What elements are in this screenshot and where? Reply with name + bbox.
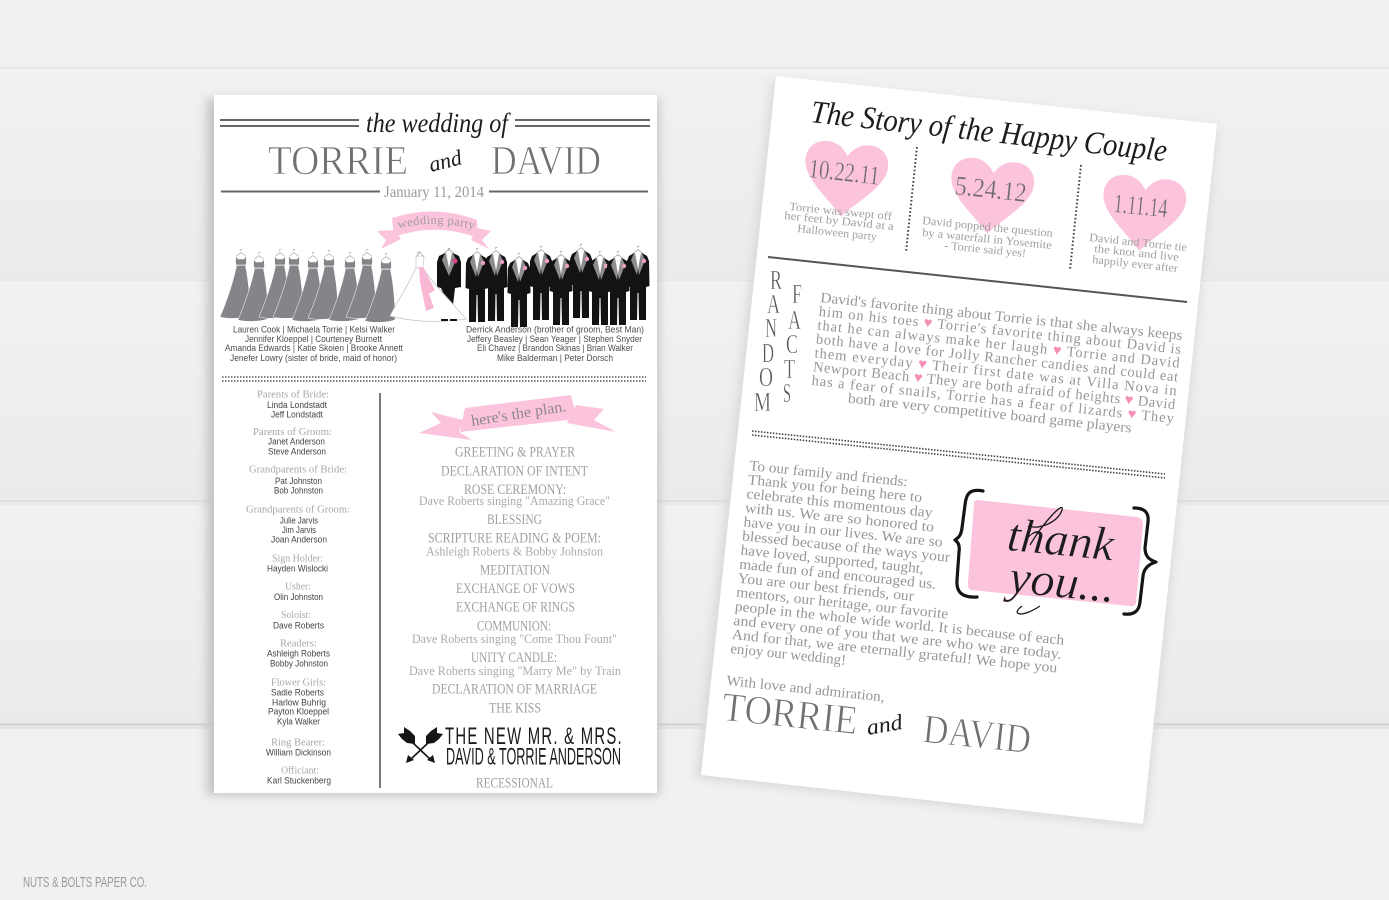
timeline: 5.24.12: - Torrie said yes! <box>944 240 1026 260</box>
thank-you letter paragraph: made fun of and encouraged us. <box>738 557 937 593</box>
heading: random (vertical letters): D <box>762 338 774 368</box>
heading: random (vertical letters): R <box>770 265 782 295</box>
sign-off: With love and admiration, <box>726 673 885 706</box>
family and attendants list: Harlow Buhrig <box>272 697 326 707</box>
timeline: 5.24.12: David popped the question <box>922 215 1054 240</box>
ceremony order list: THE KISS <box>489 700 541 716</box>
family and attendants list: Pat Johnston <box>275 476 322 486</box>
signature: couple names: and <box>865 709 905 740</box>
ribbon: here's the plan <box>419 395 616 440</box>
heading: couple names <box>268 137 601 183</box>
random facts paragraph: both are very competitive board game players <box>847 391 1133 437</box>
bridesmaid names: Jenefer Lowry (sister of bride, maid of honor) <box>230 353 397 363</box>
ceremony order list: COMMUNION: <box>477 618 551 634</box>
callout: thank you <box>955 490 1156 614</box>
thank-you letter paragraph: And for that, we are eternally grateful! We hope you <box>731 627 1058 676</box>
family and attendants list: Karl Stuckenberg <box>267 776 331 786</box>
family and attendants list <box>246 390 350 786</box>
thank-you letter paragraph: people in the whole wide world. It is because of each <box>734 599 1066 649</box>
family and attendants list: Joan Anderson <box>271 535 327 545</box>
random facts paragraph: Newport Beach ♥ They are both afraid of heights ♥ David <box>812 359 1177 413</box>
thank-you letter paragraph: with us. We are so honored to <box>744 500 935 536</box>
ceremony order list: BLESSING <box>487 512 542 528</box>
random facts paragraph: them everyday ♥ Their first date was at Villa Nova in <box>814 345 1178 399</box>
signature: couple names: DAVID <box>921 705 1033 762</box>
timeline: 10.22.11: Halloween party <box>797 223 878 243</box>
heading: facts (vertical letters): A <box>788 305 801 335</box>
bridesmaid names <box>225 324 403 363</box>
ceremony order list: Dave Roberts singing "Marry Me" by Train <box>409 663 621 678</box>
callout: thank you: thank <box>1005 509 1118 572</box>
illustration: bride gown <box>390 252 466 321</box>
groomsmen names: Mike Balderman | Peter Dorsch <box>497 353 613 363</box>
family and attendants list: Linda Londstadt <box>267 400 327 410</box>
family and attendants list: Olin Johnston <box>274 592 323 602</box>
ribbon: here's the plan: here's the plan. <box>470 398 567 430</box>
random facts paragraph: David's favorite thing about Torrie is that she always keeps <box>820 290 1184 344</box>
ceremony order list: EXCHANGE OF RINGS <box>456 600 575 616</box>
family and attendants list: Jeff Londstadt <box>271 409 323 419</box>
bridesmaid names: Amanda Edwards | Katie Skoien | Brooke Annett <box>225 343 403 353</box>
ceremony order list: Dave Roberts singing "Amazing Grace" <box>419 493 610 508</box>
thank-you letter paragraph: have loved, supported, taught, <box>740 543 925 577</box>
ceremony order list: GREETING & PRAYER <box>455 445 575 461</box>
groomsmen names <box>466 324 644 363</box>
family and attendants list: Grandparents of Groom: <box>246 504 350 515</box>
family and attendants list: Julie Jarvis <box>280 515 318 525</box>
bridesmaid names: Lauren Cook | Michaela Torrie | Kelsi Walker <box>233 324 395 334</box>
random facts paragraph: has a fear of snails, Torrie has a fear of lizards ♥ They <box>811 373 1175 427</box>
family and attendants list: Soloist: <box>281 610 311 621</box>
family and attendants list: Janet Anderson <box>268 437 325 447</box>
panel: wedding programme card <box>214 95 657 793</box>
family and attendants list: Parents of Bride: <box>257 390 329 401</box>
ceremony order list: MEDITATION <box>480 562 550 578</box>
ceremony order list: Ashleigh Roberts & Bobby Johnston <box>426 543 603 558</box>
heading: the new Mr. and Mrs.: THE NEW MR. & MRS. <box>445 724 622 750</box>
timeline: 10.22.11: 10.22.11 <box>807 153 881 191</box>
thank-you letter paragraph: Thank you for being here to <box>747 472 923 506</box>
family and attendants list: Officiant: <box>281 766 319 777</box>
heading: couple names: TORRIE <box>268 137 408 183</box>
random facts paragraph <box>809 290 1184 441</box>
heading: the new Mr. and Mrs.: DAVID & TORRIE ANDERSON <box>446 743 621 770</box>
timeline: 1.11.14: 1.11.14 <box>1112 188 1169 223</box>
timeline: 10.22.11 <box>784 139 894 243</box>
timeline: 1.11.14: the knot and live <box>1094 243 1179 264</box>
illustration: bridesmaid dresses <box>220 249 395 322</box>
family and attendants list: Flower Girls: <box>271 678 326 689</box>
heading: random (vertical letters) <box>754 265 782 417</box>
ceremony order list: DECLARATION OF MARRIAGE <box>432 682 597 698</box>
family and attendants list: Bob Johnston <box>274 486 323 496</box>
ceremony order list: ROSE CEREMONY: <box>464 482 566 498</box>
callout: thank you: you... <box>1003 551 1117 613</box>
thank-you letter paragraph: celebrate this momentous day <box>746 486 934 521</box>
heading: couple names: DAVID <box>491 137 601 183</box>
thank-you letter paragraph: To our family and friends: <box>749 458 908 490</box>
ceremony order list: UNITY CANDLE: <box>471 650 557 666</box>
heading: facts (vertical letters) <box>783 279 802 408</box>
heading: random (vertical letters): O <box>759 362 773 392</box>
family and attendants list: Sadie Roberts <box>271 688 324 698</box>
heading: facts (vertical letters): S <box>783 378 791 408</box>
ceremony order list: SCRIPTURE READING & POEM: <box>428 531 601 547</box>
thank-you letter paragraph: mentors, our heritage, our favorite <box>735 585 949 623</box>
heading: the wedding of <box>220 108 650 138</box>
family and attendants list: Ring Bearer: <box>271 737 325 748</box>
thank-you letter paragraph <box>730 458 1080 691</box>
timeline: 1.11.14: David and Torrie tie <box>1089 232 1187 254</box>
heading: random (vertical letters): N <box>765 313 777 343</box>
groomsmen names: Eli Chavez | Brandon Skinas | Brian Walker <box>477 343 633 353</box>
random facts paragraph: him on his toes ♥ Torrie's favorite thing about David is <box>818 304 1182 358</box>
thank-you letter paragraph: have you in our lives. We are so <box>743 514 943 551</box>
groomsmen names: Derrick Anderson (brother of groom, Best Man) <box>466 324 644 334</box>
ceremony order list: Dave Roberts singing "Come Thou Fount" <box>412 631 617 646</box>
date: January 11, 2014 <box>384 184 484 201</box>
thank-you letter paragraph: and every one of you that we are who we are today. <box>733 613 1062 663</box>
family and attendants list: William Dickinson <box>266 747 331 757</box>
card shadows <box>207 80 1217 827</box>
timeline: 5.24.12: 5.24.12 <box>953 170 1028 208</box>
bridesmaid names: Jennifer Kloeppel | Courteney Burnett <box>245 334 382 344</box>
timeline: 5.24.12 <box>922 156 1054 260</box>
timeline: 1.11.14: happily ever after <box>1092 254 1179 275</box>
family and attendants list: Usher: <box>285 581 311 592</box>
ceremony order list <box>409 445 621 716</box>
signature: couple names <box>720 683 1033 762</box>
icon: crossed arrows <box>398 727 443 763</box>
heading: facts (vertical letters): T <box>784 354 795 384</box>
illustration: groomsmen suits <box>466 244 650 327</box>
family and attendants list: Steve Anderson <box>268 446 326 456</box>
thank-you letter paragraph: blessed because of the ways your <box>741 528 951 566</box>
illustration: groom <box>437 248 461 314</box>
thank-you letter paragraph: enjoy our wedding! <box>730 641 847 669</box>
recessional: RECESSIONAL <box>476 775 553 791</box>
family and attendants list: Bobby Johnston <box>270 658 328 668</box>
timeline: 5.24.12: by a waterfall in Yosemite <box>922 227 1052 252</box>
ribbon: wedding party: wedding party <box>397 215 475 231</box>
heading: facts (vertical letters): F <box>792 279 802 309</box>
family and attendants list: Ashleigh Roberts <box>267 648 330 658</box>
heading: the wedding of: the wedding of <box>366 108 511 138</box>
timeline: 10.22.11: her feet by David at a <box>784 210 894 233</box>
family and attendants list: Hayden Wislocki <box>267 563 328 573</box>
ribbon: wedding party <box>377 212 491 249</box>
ceremony order list: DECLARATION OF INTENT <box>441 463 588 479</box>
signature: couple names: TORRIE <box>720 683 860 743</box>
heading: the new Mr. and Mrs. <box>445 724 622 770</box>
panel: story card <box>701 76 1217 824</box>
random facts paragraph: both have a love for Jolly Rancher candies and could eat <box>815 332 1179 385</box>
groomsmen names: Jeffery Beasley | Sean Yeager | Stephen Snyder <box>467 334 642 344</box>
heading: the story of the happy couple: The Story of the Happy Couple <box>809 93 1169 168</box>
random facts paragraph: that he can always make her laugh ♥ Torrie and David <box>817 318 1181 372</box>
heading: couple names: and <box>426 144 465 177</box>
heading: facts (vertical letters): C <box>786 329 798 359</box>
ceremony order list: EXCHANGE OF VOWS <box>456 581 575 597</box>
family and attendants list: Kyla Walker <box>277 716 320 726</box>
family and attendants list: Payton Kloeppel <box>268 707 329 717</box>
family and attendants list: Readers: <box>280 638 317 649</box>
brand watermark: NUTS & BOLTS PAPER CO. <box>23 874 147 891</box>
heading: random (vertical letters): M <box>754 387 771 417</box>
thank-you letter paragraph: You are our best friends, our <box>737 571 915 605</box>
family and attendants list: Sign Holder: <box>272 553 323 564</box>
family and attendants list: Dave Roberts <box>273 620 324 630</box>
timeline: 10.22.11: Torrie was swept off <box>789 201 893 223</box>
family and attendants list: Grandparents of Bride: <box>249 464 347 475</box>
heading: random (vertical letters): A <box>767 289 780 319</box>
family and attendants list: Parents of Groom: <box>253 427 332 438</box>
family and attendants list: Jim Jarvis <box>282 525 316 535</box>
timeline: 1.11.14 <box>1089 173 1188 275</box>
